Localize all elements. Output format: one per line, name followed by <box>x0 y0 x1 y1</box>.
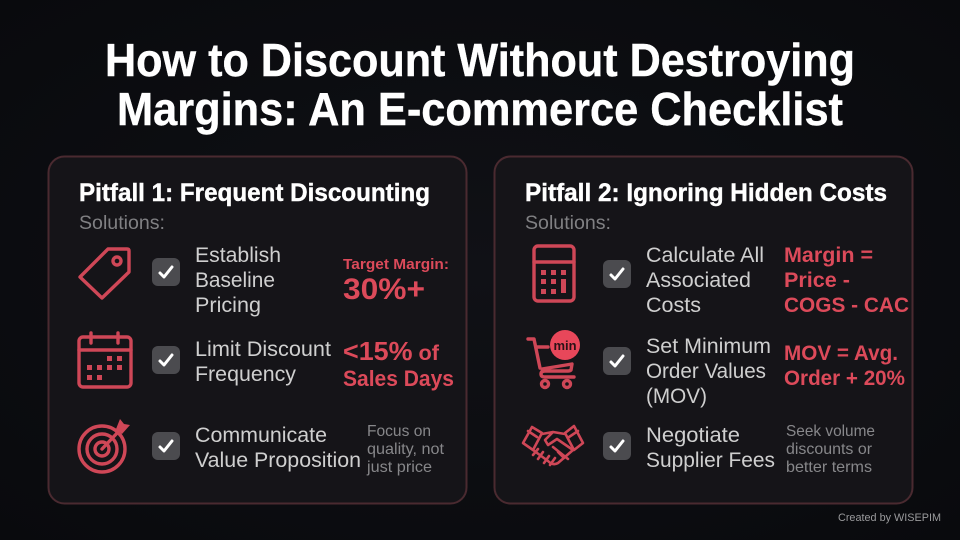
text: limit discount frequency: Frequency <box>195 363 297 386</box>
checkbox: associated costs <box>603 260 631 288</box>
icon: price tag <box>80 249 129 298</box>
text: establish baseline pricing: Establish <box>195 244 281 267</box>
note: volume discounts: Seek volume <box>786 423 875 440</box>
icon: target <box>79 419 130 472</box>
checkbox: discount frequency <box>152 346 180 374</box>
text: negotiate supplier fees: Supplier Fees <box>646 449 775 472</box>
callout: margin formula: COGS - CAC <box>784 294 909 317</box>
text: communicate value proposition: Value Proposition <box>195 449 361 472</box>
note: focus on quality <box>366 423 445 476</box>
title: How to Discount Without Destroying <box>105 34 855 86</box>
title: Margins: An E-commerce Checklist <box>117 83 843 135</box>
text: minimum order values: Order Values <box>646 360 766 383</box>
solutions label: Solutions: <box>79 213 165 234</box>
credit: Created by WISEPIM <box>838 512 941 524</box>
callout: mov formula: Order + 20% <box>784 367 905 390</box>
checkbox: baseline pricing <box>152 258 180 286</box>
callout: sales days: <15% of <box>343 336 440 366</box>
note: volume discounts <box>786 423 875 476</box>
icon: handshake <box>523 426 583 465</box>
note: focus on quality: just price <box>366 459 432 476</box>
note: focus on quality: Focus on <box>367 423 431 440</box>
callout: target margin: Target Margin: <box>343 256 449 273</box>
note: volume discounts: discounts or <box>786 441 873 458</box>
text: calculate costs <box>646 244 764 317</box>
solutions label 2: Solutions: <box>525 213 611 234</box>
callout: mov formula <box>784 342 905 390</box>
panel: pitfall 1 <box>48 156 466 504</box>
text: communicate value proposition <box>195 424 361 472</box>
note: volume discounts: better terms <box>786 459 872 476</box>
callout: sales days: Sales Days <box>343 366 454 391</box>
title <box>105 34 855 135</box>
text: calculate costs: Calculate All <box>646 244 764 267</box>
callout: target margin <box>343 256 449 306</box>
icon: shopping cart with min badge: min <box>553 338 577 353</box>
text: negotiate supplier fees <box>646 424 775 472</box>
text: communicate value proposition: Communicate <box>195 424 327 447</box>
callout: sales days <box>343 336 454 391</box>
text: minimum order values: (MOV) <box>646 385 707 408</box>
callout: margin formula <box>784 244 909 317</box>
text: establish baseline pricing <box>195 244 281 317</box>
heading: pitfall 2: Pitfall 2: Ignoring Hidden Costs <box>525 179 887 207</box>
text: establish baseline pricing: Pricing <box>195 294 261 317</box>
text: calculate costs: Costs <box>646 294 701 317</box>
text: limit discount frequency: Limit Discount <box>195 338 331 361</box>
text: negotiate supplier fees: Negotiate <box>646 424 740 447</box>
note: focus on quality: quality, not <box>367 441 445 458</box>
callout: target margin: 30%+ <box>343 273 425 306</box>
heading: pitfall 1: Pitfall 1: Frequent Discounting <box>79 179 430 207</box>
text: limit discount frequency <box>195 338 331 386</box>
panel: pitfall 2 <box>494 156 912 504</box>
text: establish baseline pricing: Baseline <box>195 269 275 292</box>
icon: shopping cart with min badge <box>528 330 580 388</box>
checkbox: value proposition <box>152 432 180 460</box>
callout: margin formula: Price - <box>784 269 850 292</box>
checkbox: supplier fees <box>603 432 631 460</box>
icon: calculator <box>534 246 574 301</box>
callout: mov formula: MOV = Avg. <box>784 342 898 365</box>
callout: margin formula: Margin = <box>784 244 873 267</box>
text: calculate costs: Associated <box>646 269 751 292</box>
icon: calendar <box>79 333 131 387</box>
checkbox: minimum order <box>603 347 631 375</box>
text: minimum order values: Set Minimum <box>646 335 771 358</box>
text: minimum order values <box>646 335 771 408</box>
